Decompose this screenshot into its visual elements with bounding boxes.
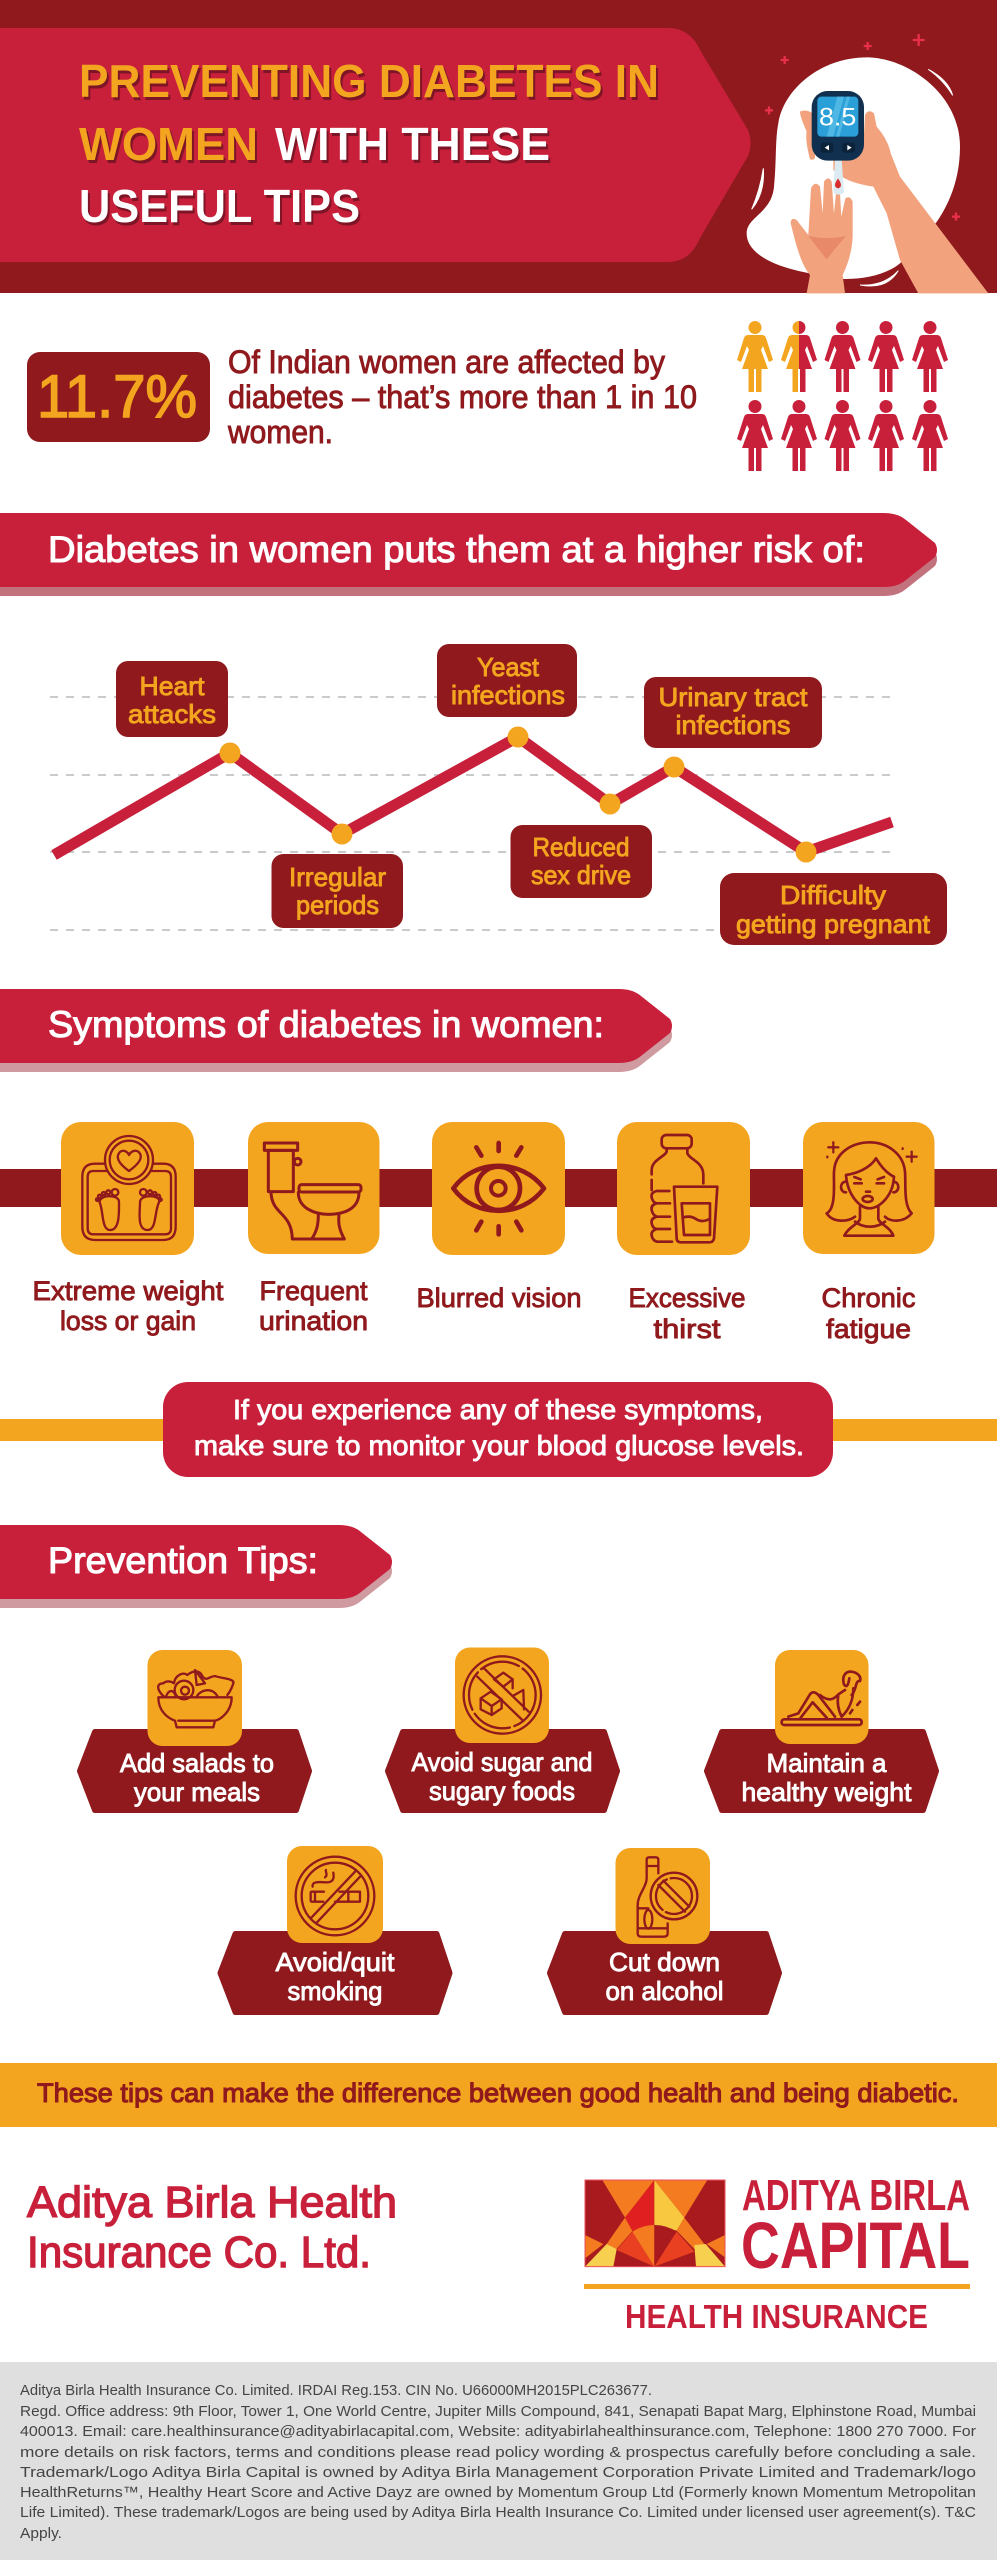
icon tile: toilet: [248, 1122, 380, 1254]
label: excessive thirst: Excessive: [628, 1283, 746, 1313]
icon tile: weighing scale: [61, 1122, 194, 1255]
icon: salad bowl: [158, 1670, 233, 1727]
label: blurred vision: Blurred vision: [416, 1283, 582, 1313]
footer: legal text: 400013. Email: care.healthinsurance@adityabirlacapital.com, Website: adityabirlahealthinsurance.com, Telephone: 1800 270 7000. For: [20, 2423, 976, 2440]
label: irregular periods: Irregular: [289, 862, 386, 892]
label: difficulty getting pregnant: [720, 873, 947, 945]
label: frequent urination: [259, 1276, 368, 1336]
tip text: on alcohol: [606, 1976, 724, 2006]
tip: salads: [80, 1650, 309, 1810]
title: [79, 55, 659, 232]
icon tile: eye: [432, 1122, 565, 1255]
footer: legal text: HealthReturns™, Healthy Heart Score and Active Dayz are owned by Momentum Group Ltd (Formerly known Momentum Metropolitan: [20, 2484, 976, 2501]
stat badge: 11.7%: [37, 363, 197, 430]
label: yeast infections: Yeast: [477, 652, 540, 682]
heading: symptoms: Symptoms of diabetes in women:: [48, 1004, 604, 1045]
logo: Aditya Birla Capital Health Insurance: [584, 2171, 970, 2335]
footer: legal text: Apply.: [20, 2525, 62, 2542]
banner: closing message: [0, 2063, 997, 2127]
tip text: healthy weight: [742, 1777, 912, 1807]
icon: sit-ups: [782, 1672, 862, 1725]
label: chronic fatigue: Chronic: [822, 1283, 916, 1313]
tip: healthy weight: [707, 1650, 936, 1810]
title: WITH THESE: [275, 118, 550, 170]
line chart: health risks: [50, 644, 947, 945]
illustration: hands testing blood glucose: [747, 34, 988, 293]
pictogram: ten women: [737, 321, 948, 471]
label: reduced sex drive: Reduced: [532, 832, 630, 862]
icon: no alcohol: [638, 1857, 697, 1937]
title ribbon: [0, 28, 750, 262]
icon tile: water bottle and glass: [617, 1122, 750, 1255]
title: USEFUL TIPS: [79, 180, 360, 232]
label: chronic fatigue: fatigue: [826, 1314, 911, 1344]
label: extreme weight: loss or gain: [60, 1306, 196, 1336]
company name: Insurance Co. Ltd.: [27, 2228, 371, 2277]
tip text: [412, 1747, 592, 1806]
heading: risks: [0, 513, 937, 596]
label: heart attacks: Heart: [140, 671, 205, 701]
logo wordmark: [625, 2171, 970, 2335]
label: urinary tract infections: [644, 677, 822, 748]
label: frequent urination: Frequent: [260, 1276, 368, 1306]
tip: sugar: [388, 1648, 617, 1810]
footer: legal text: Life Limited). These trademark/Logos are being used by Aditya Birla Health Insurance Co. Limited under licensed user agreement(s). T&C: [20, 2504, 976, 2521]
footer: legal text: [0, 2362, 997, 2560]
label: reduced sex drive: sex drive: [531, 860, 631, 890]
label: yeast infections: [437, 644, 577, 717]
label: irregular periods: [272, 854, 403, 928]
label: yeast infections: infections: [451, 680, 565, 710]
footer: legal text: more details on risk factors, terms and conditions please read policy wording & prospectus carefully before concluding a sale.: [20, 2444, 976, 2461]
label: chronic fatigue: [822, 1283, 916, 1344]
logo mark: [585, 2180, 725, 2267]
label: extreme weight: Extreme weight: [32, 1276, 224, 1306]
heading: prevention tips: Prevention Tips:: [48, 1540, 318, 1581]
label: urinary tract infections: Urinary tract: [658, 682, 808, 712]
heading: risks: Diabetes in women puts them at a higher risk of:: [48, 529, 865, 570]
tip text: [606, 1947, 724, 2006]
footer: legal text: Regd. Office address: 9th Floor, Tower 1, One World Centre, Jupiter Mills Compound, 841, Senapati Bapat Marg, Elphinstone Road, Mumbai: [20, 2403, 976, 2420]
heading: symptoms: [0, 989, 672, 1072]
tip: smoking: [220, 1846, 450, 2012]
banner: closing message: These tips can make the difference between good health and being diabetic.: [37, 2078, 959, 2108]
icon: no smoking: [296, 1857, 374, 1935]
heading: prevention tips: [0, 1525, 392, 1608]
label: heart attacks: [116, 661, 228, 737]
label: extreme weight: [32, 1276, 224, 1336]
tip text: Avoid sugar and: [412, 1747, 592, 1777]
title: WOMEN: [79, 118, 258, 170]
stat description: women.: [227, 414, 333, 450]
label: frequent urination: urination: [259, 1306, 368, 1336]
label: excessive thirst: [628, 1283, 746, 1344]
tip text: your meals: [134, 1777, 260, 1807]
header panel: [0, 0, 997, 293]
label: irregular periods: periods: [296, 890, 379, 920]
tip text: [120, 1748, 274, 1807]
tip text: Maintain a: [766, 1748, 887, 1778]
tip text: Avoid/quit: [276, 1947, 395, 1977]
icon tile: tired woman: [803, 1122, 934, 1254]
logo wordmark: HEALTH INSURANCE: [625, 2298, 928, 2335]
tip: alcohol: [550, 1848, 779, 2012]
statistic panel: [27, 321, 948, 471]
symptoms panel: [0, 1122, 997, 1344]
company name: Aditya Birla Health: [27, 2178, 397, 2227]
stat badge: [27, 352, 210, 442]
tip text: smoking: [288, 1976, 382, 2006]
stat description: Of Indian women are affected by: [228, 344, 665, 380]
label: urinary tract infections: infections: [676, 710, 790, 740]
icon: no sugar: [464, 1656, 541, 1734]
chart markers: [220, 726, 816, 862]
tip text: Add salads to: [120, 1748, 274, 1778]
callout: monitor blood glucose: [0, 1382, 997, 1477]
tip text: sugary foods: [429, 1776, 575, 1806]
label: difficulty getting pregnant: Difficulty: [780, 880, 886, 910]
callout: monitor blood glucose: make sure to monitor your blood glucose levels.: [194, 1430, 804, 1461]
footer: legal text: Trademark/Logo Aditya Birla Capital is owned by Aditya Birla Management Corporation Private Limited and Trademark/logo: [20, 2464, 976, 2481]
tip text: [742, 1748, 912, 1807]
footer: legal text: Aditya Birla Health Insurance Co. Limited. IRDAI Reg.153. CIN No. U66000MH2015PLC263677.: [20, 2382, 652, 2399]
label: heart attacks: attacks: [128, 699, 216, 729]
label: excessive thirst: thirst: [654, 1314, 721, 1344]
illustration: hands testing blood glucose: 8.5: [819, 104, 856, 131]
callout: monitor blood glucose: If you experience any of these symptoms,: [233, 1394, 763, 1425]
company name: [27, 2178, 397, 2277]
label: difficulty getting pregnant: getting pregnant: [736, 909, 931, 939]
label: reduced sex drive: [510, 825, 652, 898]
title: PREVENTING DIABETES IN: [79, 55, 659, 107]
tip text: [276, 1947, 395, 2006]
tip text: Cut down: [609, 1947, 720, 1977]
stat description: [227, 344, 697, 450]
stat description: diabetes – that’s more than 1 in 10: [228, 379, 697, 415]
